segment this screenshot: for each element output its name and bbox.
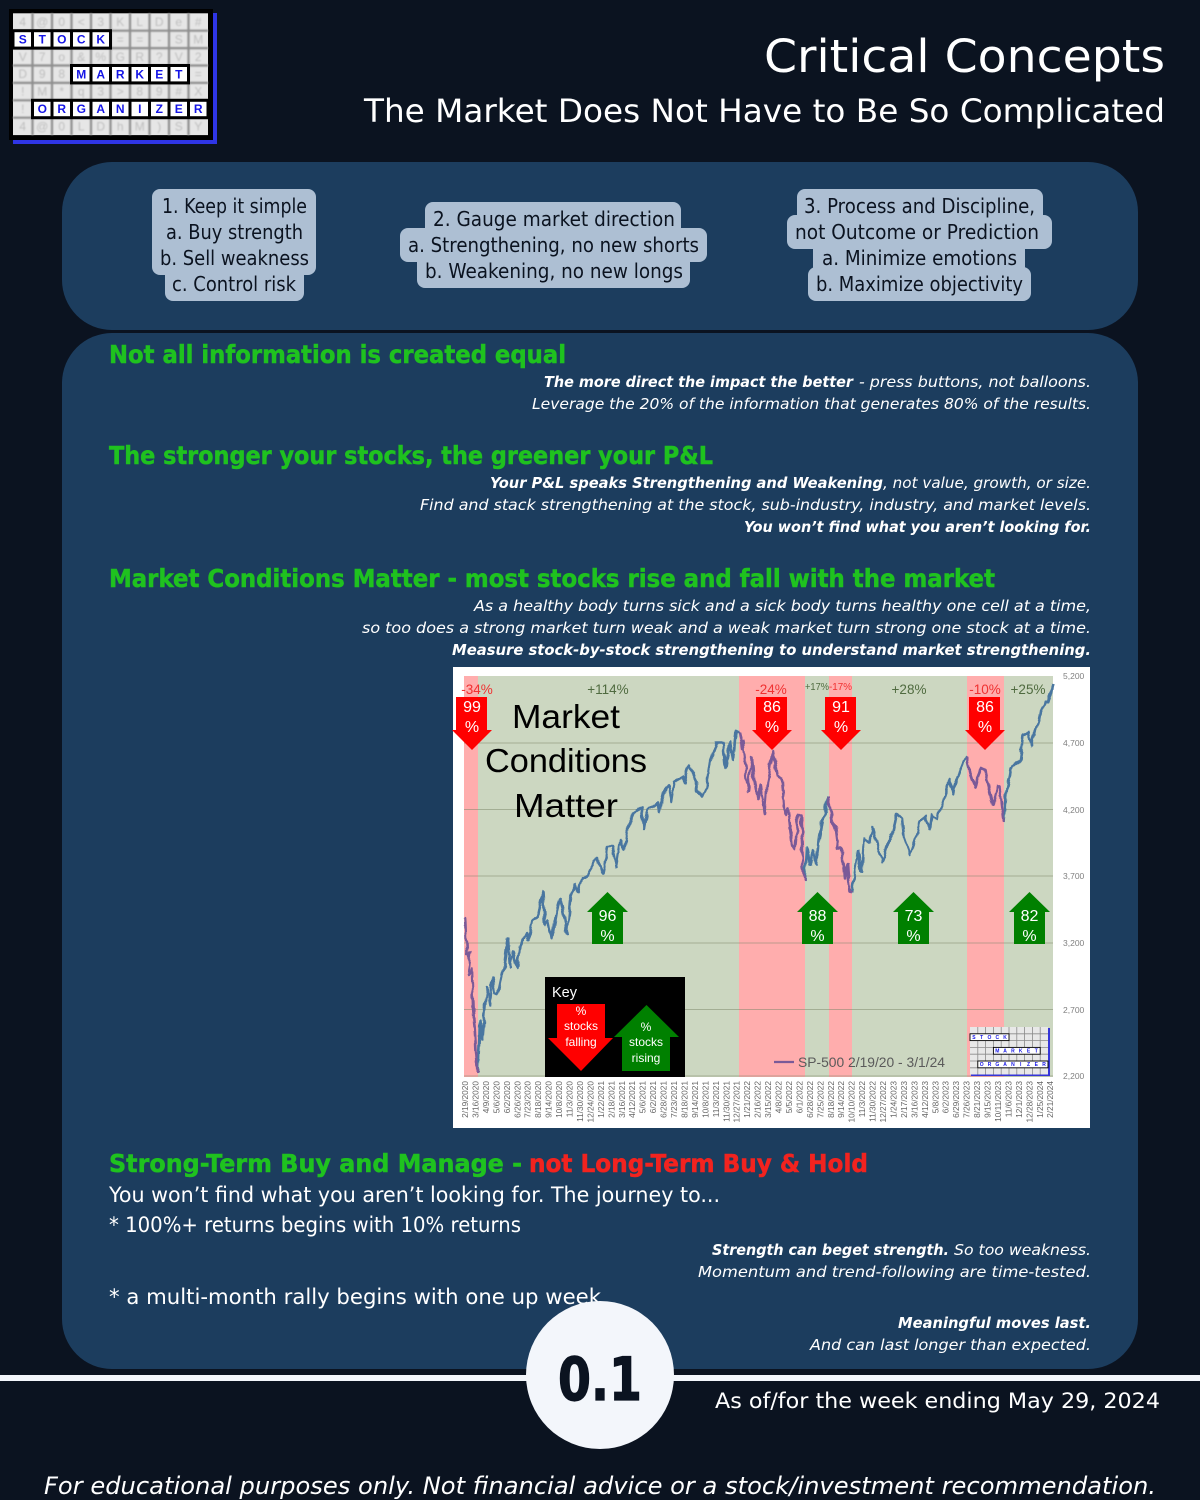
principle 2: gauge market direction: a. Strengthening, no new shorts xyxy=(408,233,699,257)
principle 2: gauge market direction: 2. Gauge market direction xyxy=(433,207,675,231)
x axis date labels: 12/27/2021 xyxy=(732,1081,742,1123)
x axis date labels: 10/8/2020 xyxy=(554,1081,564,1118)
y axis labels xyxy=(1063,671,1085,1081)
text block: healthy body: As a healthy body turns sick and a sick body turns healthy one cell at a time, xyxy=(473,597,1091,615)
logo: Stock Market Organizer: 4@0<3KLDe# xyxy=(19,15,202,29)
x axis date labels: 3/15/2022 xyxy=(763,1081,773,1118)
arrow: 82% rising: % xyxy=(1022,928,1037,945)
period returns: +114% xyxy=(587,682,629,697)
x axis date labels: 6/28/2022 xyxy=(805,1081,815,1118)
text block: meaningful moves: Meaningful moves last. xyxy=(898,1314,1091,1332)
footer disclaimer: For educational purposes only. Not financial advice or a stock/investment recommendation. xyxy=(44,1472,1156,1500)
period returns: -24% xyxy=(755,682,787,697)
x axis date labels: 7/23/2020 xyxy=(523,1081,533,1118)
chart title text: Matter xyxy=(514,787,618,824)
text block: healthy body: so too does a strong market turn weak and a weak market turn strong one stock at a time. xyxy=(362,619,1091,637)
x axis date labels: 6/1/2022 xyxy=(794,1081,804,1113)
key: % xyxy=(641,1020,652,1034)
x axis date labels: 2/16/2022 xyxy=(753,1081,763,1118)
y axis labels: 4,700 xyxy=(1063,738,1085,748)
legend: SP-500 2/19/20 - 3/1/24 xyxy=(798,1055,945,1070)
text block: strength begets strength: Strength can beget strength. xyxy=(712,1241,949,1259)
title: Critical Concepts xyxy=(764,30,1165,83)
x axis date labels: 12/28/2023 xyxy=(1024,1081,1034,1123)
x axis date labels: 2/19/2020 xyxy=(460,1081,470,1118)
x axis date labels: 9/14/2021 xyxy=(690,1081,700,1118)
x axis date labels: 6/29/2023 xyxy=(951,1081,961,1118)
x axis date labels: 9/14/2020 xyxy=(544,1081,554,1118)
x axis date labels: 1/22/2021 xyxy=(596,1081,606,1118)
x axis date labels: 6/28/2021 xyxy=(659,1081,669,1118)
x axis date labels: 8/18/2020 xyxy=(533,1081,543,1118)
text block: P&L: Your P&L speaks Strengthening and Weakening xyxy=(490,474,883,492)
period returns: -17% xyxy=(829,681,852,693)
period returns: +25% xyxy=(1011,682,1045,697)
x axis date labels: 4/12/2021 xyxy=(627,1081,637,1118)
heading: strong-term buy and manage: not Long-Term Buy & Hold xyxy=(529,1149,868,1178)
price line: rising phases xyxy=(478,685,1053,1072)
arrow: 91% falling: % xyxy=(834,719,848,736)
arrow: 88% rising: % xyxy=(810,928,825,945)
principle 2: gauge market direction: b. Weakening, no new longs xyxy=(425,259,683,283)
x axis date labels: 7/26/2023 xyxy=(962,1081,972,1118)
y axis labels: 2,200 xyxy=(1063,1071,1085,1081)
x axis date labels: 7/23/2021 xyxy=(669,1081,679,1118)
y axis labels: 3,200 xyxy=(1063,938,1085,948)
principle 2: gauge market direction xyxy=(400,202,707,288)
period returns: +28% xyxy=(892,682,926,697)
x axis date labels: 9/15/2023 xyxy=(982,1081,992,1118)
text block: strength begets strength: So too weakness. xyxy=(954,1241,1091,1259)
x axis date labels: 7/25/2022 xyxy=(815,1081,825,1118)
key: % xyxy=(576,1004,587,1018)
arrow: 99% falling xyxy=(452,697,492,750)
text block: healthy body xyxy=(362,597,1091,659)
logo: Stock Market Organizer xyxy=(9,9,217,144)
period returns: -34% xyxy=(461,682,493,697)
key: stocks xyxy=(564,1019,598,1033)
chart: S&P 500 market conditions xyxy=(452,667,1090,1128)
x axis date labels: 4/9/2020 xyxy=(481,1081,491,1113)
logo: Stock Market Organizer: MARKET xyxy=(76,67,183,81)
x axis date labels: 8/18/2021 xyxy=(679,1081,689,1118)
x axis date labels: 1/21/2022 xyxy=(742,1081,752,1118)
logo: Stock Market Organizer: ORGANIZER xyxy=(38,102,203,116)
subtitle: The Market Does Not Have to Be So Complicated xyxy=(363,92,1165,130)
x axis date labels: 6/2/2021 xyxy=(648,1081,658,1113)
x axis date labels: 10/10/2022 xyxy=(847,1081,857,1123)
key xyxy=(545,977,685,1077)
x axis date labels: 11/3/2020 xyxy=(564,1081,574,1117)
principle 3: process and discipline: not Outcome or Prediction xyxy=(795,220,1039,244)
arrow: 73% rising xyxy=(893,892,934,945)
panel: three principles xyxy=(62,162,1138,330)
x axis date labels: 6/2/2020 xyxy=(502,1081,512,1113)
x axis date labels: 3/16/2023 xyxy=(909,1081,919,1118)
arrow: 86% falling: % xyxy=(765,719,779,736)
y axis labels: 3,700 xyxy=(1063,871,1085,881)
x axis date labels: 12/1/2023 xyxy=(1014,1081,1024,1118)
x axis date labels: 11/30/2020 xyxy=(575,1081,585,1122)
mini logo xyxy=(970,1027,1050,1076)
period returns: +17% xyxy=(805,681,829,693)
x axis date labels: 1/25/2024 xyxy=(1035,1081,1045,1118)
price line: falling phases xyxy=(465,731,1004,1072)
text block: P&L xyxy=(420,474,1091,536)
arrow: 73% rising: 73 xyxy=(905,908,922,925)
arrow: 88% rising: 88 xyxy=(809,908,826,925)
logo: Stock Market Organizer: D98= xyxy=(18,67,202,81)
date line: As of/for the week ending May 29, 2024 xyxy=(715,1389,1160,1414)
chart title text: Conditions xyxy=(485,742,647,779)
x axis date labels xyxy=(460,1081,1055,1123)
chart title text: Market xyxy=(512,698,620,735)
x axis date labels: 5/8/2023 xyxy=(930,1081,940,1113)
heading: strong-term buy and manage: Strong-Term Buy and Manage - xyxy=(109,1149,522,1178)
mini logo: MARKET xyxy=(995,1049,1038,1055)
arrow: 82% rising: 82 xyxy=(1021,908,1038,925)
arrow: 86% falling xyxy=(965,697,1005,750)
mini logo: ORGANIZER xyxy=(980,1062,1046,1068)
text block: P&L: You won’t find what you aren’t looking for. xyxy=(744,518,1091,536)
arrow: 96% rising xyxy=(587,892,628,945)
period returns xyxy=(461,681,1045,697)
y axis labels: 5,200 xyxy=(1063,671,1085,681)
x axis date labels: 9/14/2022 xyxy=(836,1081,846,1118)
x axis date labels: 5/6/2020 xyxy=(491,1081,501,1113)
text block: P&L: , not value, growth, or size. xyxy=(883,474,1091,492)
x axis date labels: 3/16/2020 xyxy=(470,1081,480,1118)
text block: direct impact xyxy=(532,373,1091,413)
panel: main content background xyxy=(62,333,1138,1369)
text block: direct impact: The more direct the impact the better xyxy=(544,373,854,391)
text block: meaningful moves xyxy=(809,1314,1091,1354)
arrow: 96% rising: 96 xyxy=(599,908,616,925)
x axis date labels: 11/3/2022 xyxy=(857,1081,867,1117)
principle 1: keep it simple: 1. Keep it simple xyxy=(162,194,307,218)
badge: 0.1 xyxy=(526,1301,674,1449)
heading: strong-term buy and manage xyxy=(109,1149,868,1178)
heading: market conditions matter: Market Conditions Matter - most stocks rise and fall with the market xyxy=(109,564,995,593)
principle 3: process and discipline: a. Minimize emotions xyxy=(822,246,1017,270)
principle 1: keep it simple: a. Buy strength xyxy=(166,220,303,244)
arrow: 91% falling: 91 xyxy=(832,699,850,716)
x axis date labels: 8/18/2022 xyxy=(826,1081,836,1118)
text block: healthy body: Measure stock-by-stock strengthening to understand market strengthening. xyxy=(452,641,1091,659)
y axis labels: 4,200 xyxy=(1063,805,1085,815)
key: Key xyxy=(552,985,578,1001)
arrow: 86% falling: 86 xyxy=(976,699,994,716)
logo: Stock Market Organizer: 4@0LDhM)SY xyxy=(19,119,202,133)
arrow: 73% rising: % xyxy=(906,928,921,945)
x axis date labels: 11/30/2022 xyxy=(868,1081,878,1122)
x axis date labels: 4/8/2022 xyxy=(774,1081,784,1113)
x axis date labels: 8/21/2023 xyxy=(972,1081,982,1118)
arrow: 86% falling: % xyxy=(978,719,992,736)
x axis date labels: 2/18/2021 xyxy=(606,1081,616,1118)
text block: the journey: You won’t find what you aren’t looking for. The journey to... xyxy=(108,1183,720,1208)
x axis date labels: 1/24/2023 xyxy=(888,1081,898,1118)
key: rising xyxy=(632,1051,660,1065)
mini logo: STOCK xyxy=(972,1035,1007,1041)
principle 3: process and discipline xyxy=(787,189,1052,301)
principle 1: keep it simple: c. Control risk xyxy=(172,272,296,296)
arrow: 82% rising xyxy=(1009,892,1050,945)
logo: Stock Market Organizer: ! xyxy=(21,102,24,116)
text block: the journey xyxy=(108,1183,720,1238)
arrow: 96% rising: % xyxy=(600,928,615,945)
principle 3: process and discipline: b. Maximize objectivity xyxy=(816,272,1023,296)
text block: multi-month rally: * a multi-month rally begins with one up week xyxy=(109,1285,602,1310)
arrow: 86% falling xyxy=(752,697,792,750)
badge: 0.1: 0.1 xyxy=(558,1345,642,1415)
arrow: 99% falling: 99 xyxy=(463,699,481,716)
principle 3: process and discipline: 3. Process and Discipline, xyxy=(804,194,1035,218)
text block: the journey: * 100%+ returns begins with 10% returns xyxy=(109,1213,521,1238)
text block: strength begets strength: Momentum and trend-following are time-tested. xyxy=(698,1263,1091,1281)
x axis date labels: 3/16/2021 xyxy=(617,1081,627,1118)
x axis date labels: 5/5/2022 xyxy=(784,1081,794,1113)
logo: Stock Market Organizer: !M*q3>89#X xyxy=(21,85,202,99)
x axis date labels: 6/2/2023 xyxy=(941,1081,951,1113)
x axis date labels: 10/11/2023 xyxy=(993,1081,1003,1122)
x axis date labels: 11/3/2021 xyxy=(711,1081,721,1117)
arrow: 86% falling: 86 xyxy=(763,699,781,716)
principle 1: keep it simple xyxy=(152,189,316,301)
x axis date labels: 6/26/2020 xyxy=(512,1081,522,1118)
key: falling xyxy=(565,1035,597,1049)
x axis date labels: 10/8/2021 xyxy=(700,1081,710,1118)
text block: strength begets strength xyxy=(698,1241,1091,1281)
x axis date labels: 11/6/2023 xyxy=(1003,1081,1013,1117)
text block: direct impact: Leverage the 20% of the information that generates 80% of the results. xyxy=(532,395,1091,413)
text block: direct impact: - press buttons, not balloons. xyxy=(859,373,1091,391)
x axis date labels: 5/6/2021 xyxy=(638,1081,648,1113)
period returns: -10% xyxy=(969,682,1001,697)
logo: Stock Market Organizer: V7o&%GR?V2 xyxy=(19,50,202,64)
x axis date labels: 11/30/2021 xyxy=(721,1081,731,1122)
text block: meaningful moves: And can last longer than expected. xyxy=(809,1336,1091,1354)
principle 1: keep it simple: b. Sell weakness xyxy=(160,246,309,270)
x axis date labels: 4/12/2023 xyxy=(920,1081,930,1118)
arrow: 99% falling: % xyxy=(465,719,479,736)
x axis date labels: 12/27/2022 xyxy=(878,1081,888,1123)
arrow: 88% rising xyxy=(797,892,838,945)
text block: P&L: Find and stack strengthening at the stock, sub-industry, industry, and market levels. xyxy=(420,496,1091,514)
key: stocks xyxy=(629,1035,663,1049)
x axis date labels: 2/21/2024 xyxy=(1045,1081,1055,1118)
x axis date labels: 2/17/2023 xyxy=(899,1081,909,1118)
x axis date labels: 12/24/2020 xyxy=(585,1081,595,1123)
y axis labels: 2,700 xyxy=(1063,1005,1085,1015)
chart title text xyxy=(485,698,647,824)
logo: Stock Market Organizer: STOCK xyxy=(19,33,105,47)
heading: not all information: Not all information is created equal xyxy=(109,340,566,369)
logo: Stock Market Organizer: ==-SM xyxy=(117,32,203,46)
heading: stronger stocks: The stronger your stocks, the greener your P&L xyxy=(109,441,713,470)
arrow: 91% falling xyxy=(821,697,861,750)
